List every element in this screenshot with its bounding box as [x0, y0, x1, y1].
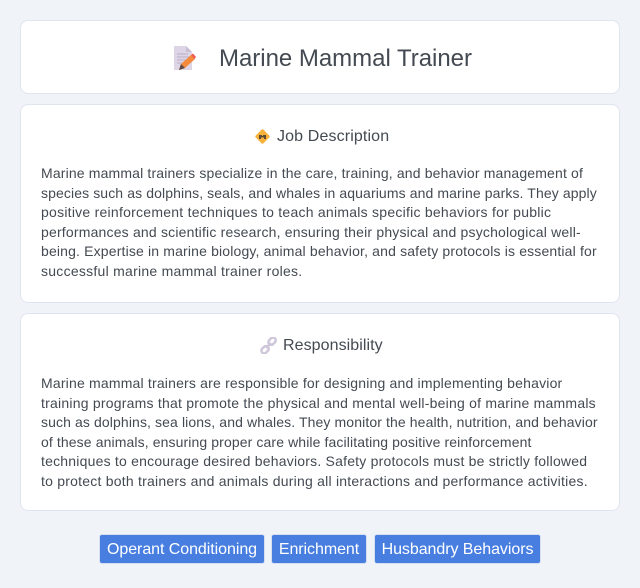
responsibility text: Marine mammal trainers are responsible for designing and implementing behavior	[41, 375, 562, 391]
tag: enrichment	[271, 534, 367, 564]
job description text: being. Expertise in marine biology, animal behavior, and safety protocols is essential for	[41, 243, 597, 259]
job description text: Marine mammal trainers specialize in the care, training, and behavior management of	[41, 165, 583, 181]
tag: husbandry behaviors: Husbandry Behaviors	[382, 541, 533, 558]
job description text: species such as dolphins, seals, and whales in aquariums and marine parks. They apply	[41, 184, 597, 200]
responsibility text: to protect both trainers and animals during all interactions and performance activities.	[41, 472, 588, 488]
icon: chain link	[260, 337, 277, 354]
icon: document with pencil	[174, 46, 196, 70]
responsibility text: techniques to encourage desired behaviors. Safety protocols must be strictly followed	[41, 453, 587, 469]
job description text: successful marine mammal trainer roles.	[41, 262, 302, 278]
panel: responsibility	[20, 313, 620, 511]
panel: job description	[20, 104, 620, 303]
responsibility text: of these animals, ensuring proper care while facilitating positive reinforcement	[41, 434, 532, 450]
job description text	[41, 165, 597, 278]
heading: job description: Job Description	[277, 128, 389, 145]
heading: responsibility: Responsibility	[283, 337, 383, 354]
title: Marine Mammal Trainer	[219, 45, 472, 72]
responsibility text: such as dolphins, sea lions, and whales. They monitor the health, nutrition, and behavior	[41, 414, 598, 430]
tag: enrichment: Enrichment	[279, 541, 359, 558]
job description text: positive reinforcement techniques to teach animals specific behaviors for public	[41, 204, 551, 220]
tags row	[99, 534, 541, 564]
icon: diamond sign	[255, 129, 270, 144]
tag: operant conditioning	[99, 534, 265, 564]
header panel	[20, 20, 620, 94]
tag: husbandry behaviors	[374, 534, 541, 564]
responsibility text	[41, 375, 598, 489]
responsibility text: training programs that promote the physical and mental well-being of marine mammals	[41, 394, 596, 410]
tag: operant conditioning: Operant Conditioning	[107, 541, 257, 558]
job description text: performances and scientific research, ensuring their physical and psychological well-	[41, 224, 581, 240]
